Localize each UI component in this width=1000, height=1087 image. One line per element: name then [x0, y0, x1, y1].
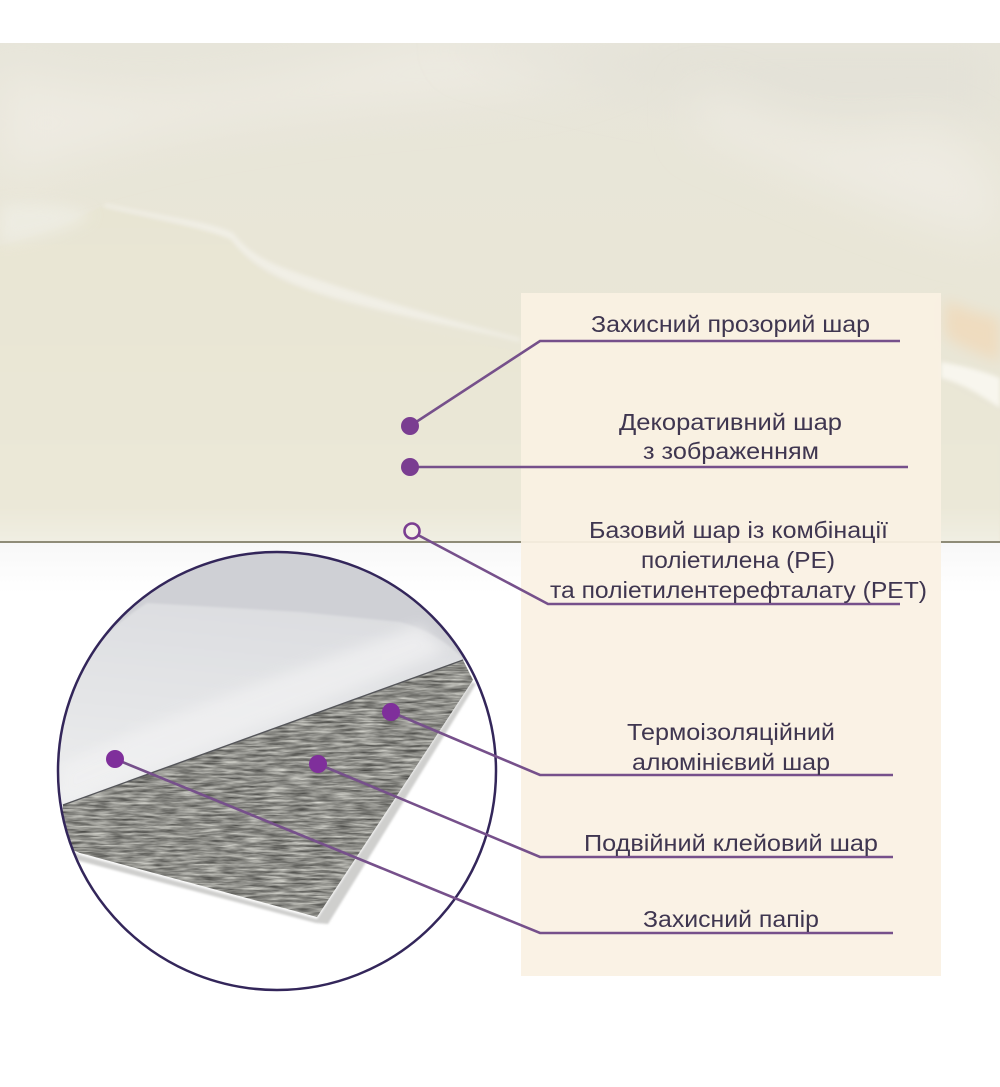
panel bottom edge: [0, 541, 1000, 543]
callout: base layer: Базовий шар із комбінації: [589, 517, 888, 543]
soft shadow under the panel: [0, 543, 1000, 593]
marble surface of the wall panel: [0, 43, 1000, 560]
marble vein: [105, 205, 520, 340]
circle outline: [58, 552, 496, 990]
white protective paper: [50, 603, 465, 810]
callout: thermal insulating aluminium layer: [382, 703, 893, 775]
text background panel: [521, 293, 941, 976]
magnified circle with back side layers: [50, 545, 500, 990]
lower marble area below the vein: [0, 526, 1000, 541]
callout: decorative layer: [401, 409, 908, 476]
rolled edge highlight of the paper: [174, 625, 436, 730]
callout: decorative layer: Декоративний шар: [619, 409, 842, 435]
callout: base layer: та поліетилентерефталату (PET): [550, 577, 927, 603]
callout: base layer: поліетилена (PE): [641, 547, 835, 573]
cloudy light patch at left: [5, 208, 78, 236]
aluminium foil layer: [62, 660, 473, 917]
foil shadow edge: [62, 682, 476, 924]
grey background of the film: [62, 553, 464, 806]
callout: thermal insulating aluminium layer: Термоізоляційний: [627, 719, 835, 745]
callout: double adhesive layer: [309, 755, 893, 857]
callout: protective paper: [106, 750, 893, 933]
callout: protective transparent layer: Захисний прозорий шар: [591, 311, 870, 337]
callout: thermal insulating aluminium layer: алюмінієвий шар: [632, 749, 830, 775]
callout: double adhesive layer: Подвійний клейовий шар: [584, 830, 878, 856]
callout: decorative layer: з зображенням: [643, 438, 819, 464]
callout: protective transparent layer: [401, 311, 900, 435]
callout: protective paper: Захисний папір: [643, 906, 819, 932]
marble vein at right edge: [941, 362, 1000, 408]
callout: base layer: [404, 517, 927, 604]
